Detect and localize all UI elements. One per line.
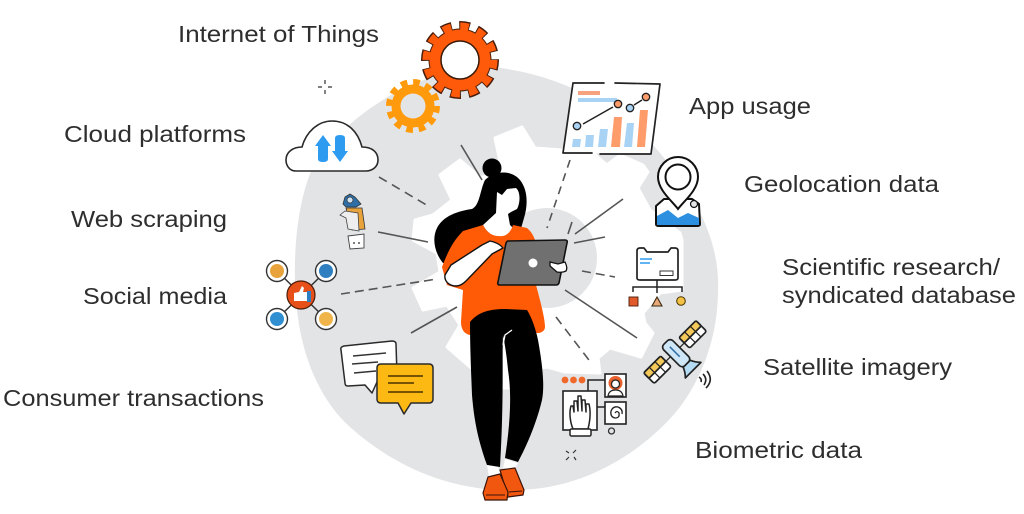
connector lines (341, 145, 637, 364)
label: Cloud platforms: Cloud platforms (64, 121, 246, 147)
white gear behind figure (413, 127, 682, 388)
label: Social media: Social media (83, 283, 227, 309)
label: Internet of Things: Internet of Things (178, 21, 379, 47)
tablet (498, 240, 567, 285)
figure: woman with tablet (434, 158, 567, 500)
front shoe (483, 474, 508, 500)
icon: app usage chart (563, 83, 660, 154)
shoe sole lines (486, 491, 522, 495)
icon: database folder tree (629, 248, 685, 306)
trouser crease (503, 330, 512, 345)
label: Web scraping: Web scraping (71, 206, 227, 232)
sparkle bottom (566, 450, 576, 460)
icon: satellite (639, 316, 719, 396)
background grey blob (295, 67, 718, 490)
label: Consumer transactions: Consumer transactions (3, 385, 264, 411)
sparkle top (318, 80, 332, 94)
label: Scientific research / syndicated database: syndicated database (782, 282, 1016, 308)
face and neck (483, 188, 520, 236)
hand (550, 262, 567, 272)
label: Scientific research / syndicated database: Scientific research/ (782, 254, 1001, 280)
arm (445, 241, 503, 286)
icon: cloud (286, 121, 378, 171)
hair (434, 158, 527, 268)
black trousers (470, 309, 543, 467)
tablet camera dot (528, 258, 538, 268)
inner grey gear hub (497, 208, 597, 308)
socks (487, 459, 518, 477)
icon: chat bubbles (341, 341, 433, 414)
label: Satellite imagery: Satellite imagery (763, 354, 953, 380)
back shoe (500, 468, 524, 497)
icon: Internet of Things gears (390, 26, 494, 130)
icon: web scraping robot (340, 194, 365, 249)
icon: geolocation pin on map (656, 157, 700, 226)
label: Biometric data: Biometric data (695, 437, 862, 463)
orange shirt (442, 225, 545, 335)
label: App usage: App usage (689, 93, 811, 119)
icon: biometric scan (562, 374, 626, 436)
label: Geolocation data: Geolocation data (744, 171, 939, 197)
label: Scientific research / syndicated database (782, 254, 1016, 308)
icon: social media network (266, 260, 336, 330)
